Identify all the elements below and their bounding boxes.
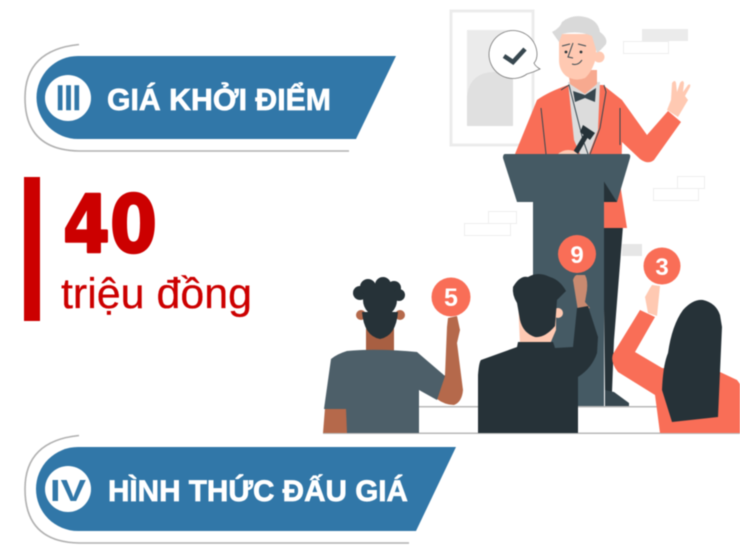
bidder 3 sleeve and body — [612, 310, 740, 433]
bidder 5 shirt — [324, 350, 445, 433]
section heading III — [25, 44, 396, 151]
bidder 5 — [323, 277, 463, 433]
auctioneer gripping hand — [558, 150, 578, 154]
illustration: auctioneer — [503, 16, 690, 407]
auctioneer ear — [594, 52, 604, 62]
auctioneer face — [562, 43, 586, 64]
auctioneer neck — [568, 70, 597, 94]
bidder 3 hand — [645, 285, 660, 316]
paddle number 9: 9 — [570, 242, 584, 269]
paddle number 9 — [558, 235, 596, 273]
speech bubble with check mark — [489, 31, 540, 79]
bidder 9 hand — [573, 275, 590, 311]
section heading IV: HÌNH THỨC ĐẤU GIÁ — [108, 474, 408, 508]
starting price value: 40 — [63, 179, 157, 271]
bidder 9 jacket — [478, 306, 598, 433]
auctioneer raised hand — [667, 81, 690, 117]
price unit: triệu đồng — [61, 270, 252, 318]
section heading III: GIÁ KHỞI ĐIỂM — [107, 81, 331, 117]
auctioneer shirt — [568, 82, 600, 154]
bidder 9 neck and face — [518, 300, 556, 344]
bidder 3 — [612, 285, 740, 433]
section heading IV — [25, 436, 456, 543]
bidder 9 ear — [553, 308, 563, 318]
paddle number 5: 5 — [444, 284, 458, 312]
auctioneer legs — [603, 226, 623, 392]
paddle number 3: 3 — [655, 254, 669, 281]
section heading IV: IV — [50, 473, 86, 508]
section heading III: III — [56, 79, 81, 118]
auctioneer shoe — [605, 390, 629, 406]
bidder 5 arm — [323, 316, 463, 433]
bidder 9 hair — [513, 274, 566, 337]
bidder 9 — [478, 274, 598, 433]
bidder 5 hair — [353, 277, 405, 339]
bidder 5 neck and ears — [366, 325, 394, 352]
auctioneer hair — [552, 16, 606, 53]
accent bar — [24, 177, 40, 321]
paddle number 5 — [432, 278, 470, 316]
bidder 3 hair — [662, 300, 722, 422]
illustration: background wall — [451, 11, 704, 256]
auctioneer jacket — [515, 85, 681, 228]
auctioneer head — [559, 34, 596, 80]
stage lines — [323, 406, 740, 434]
auctioneer bow tie — [573, 88, 596, 102]
podium — [503, 154, 630, 202]
gavel — [573, 134, 588, 154]
paddle number 3 — [644, 248, 680, 284]
